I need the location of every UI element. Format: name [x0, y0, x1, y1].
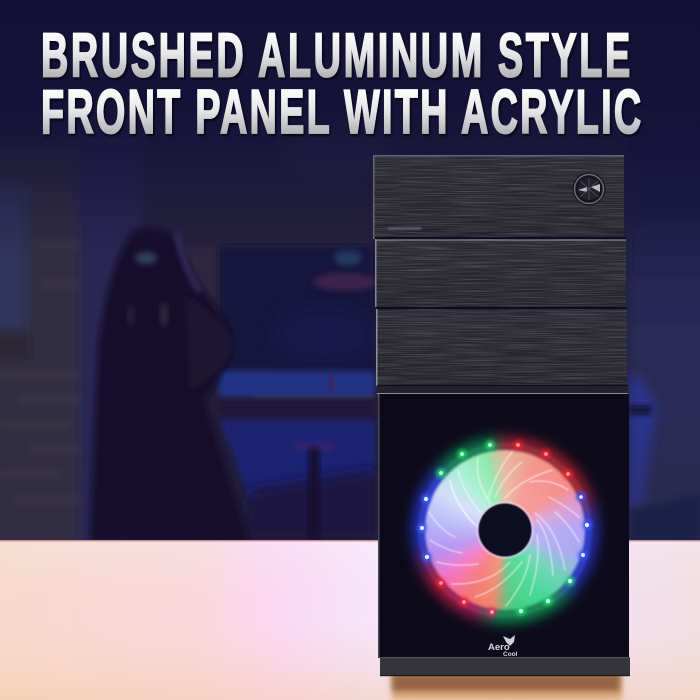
right chair and shelf	[628, 372, 700, 550]
base strip	[380, 657, 630, 676]
monitor and desk	[219, 247, 377, 542]
case shadow on table	[392, 672, 622, 700]
LED points	[420, 443, 589, 614]
wooden table	[0, 540, 700, 700]
title: BRUSHED ALUMINUM STYLE	[41, 21, 630, 90]
title: FRONT PANEL WITH ACRYLIC	[41, 77, 641, 146]
AeroCool logo	[488, 635, 518, 658]
top brushed panel	[373, 155, 624, 239]
third brushed panel	[376, 307, 627, 386]
AeroCool logo: Cool	[503, 651, 518, 658]
fan frame ring	[418, 443, 592, 617]
acrylic panel	[378, 394, 629, 658]
brick wall texture	[0, 240, 83, 504]
fan blade highlights	[429, 452, 579, 606]
AeroCool logo: Aero	[488, 642, 510, 653]
fan hub	[476, 501, 534, 559]
second brushed panel	[375, 237, 626, 307]
ledge strip	[377, 385, 628, 394]
fan outer glow	[411, 436, 599, 624]
fan blades	[425, 450, 585, 610]
LED halos	[418, 440, 592, 616]
gaming chair	[90, 228, 250, 542]
top gradient fade	[0, 0, 700, 260]
power button	[572, 172, 606, 206]
